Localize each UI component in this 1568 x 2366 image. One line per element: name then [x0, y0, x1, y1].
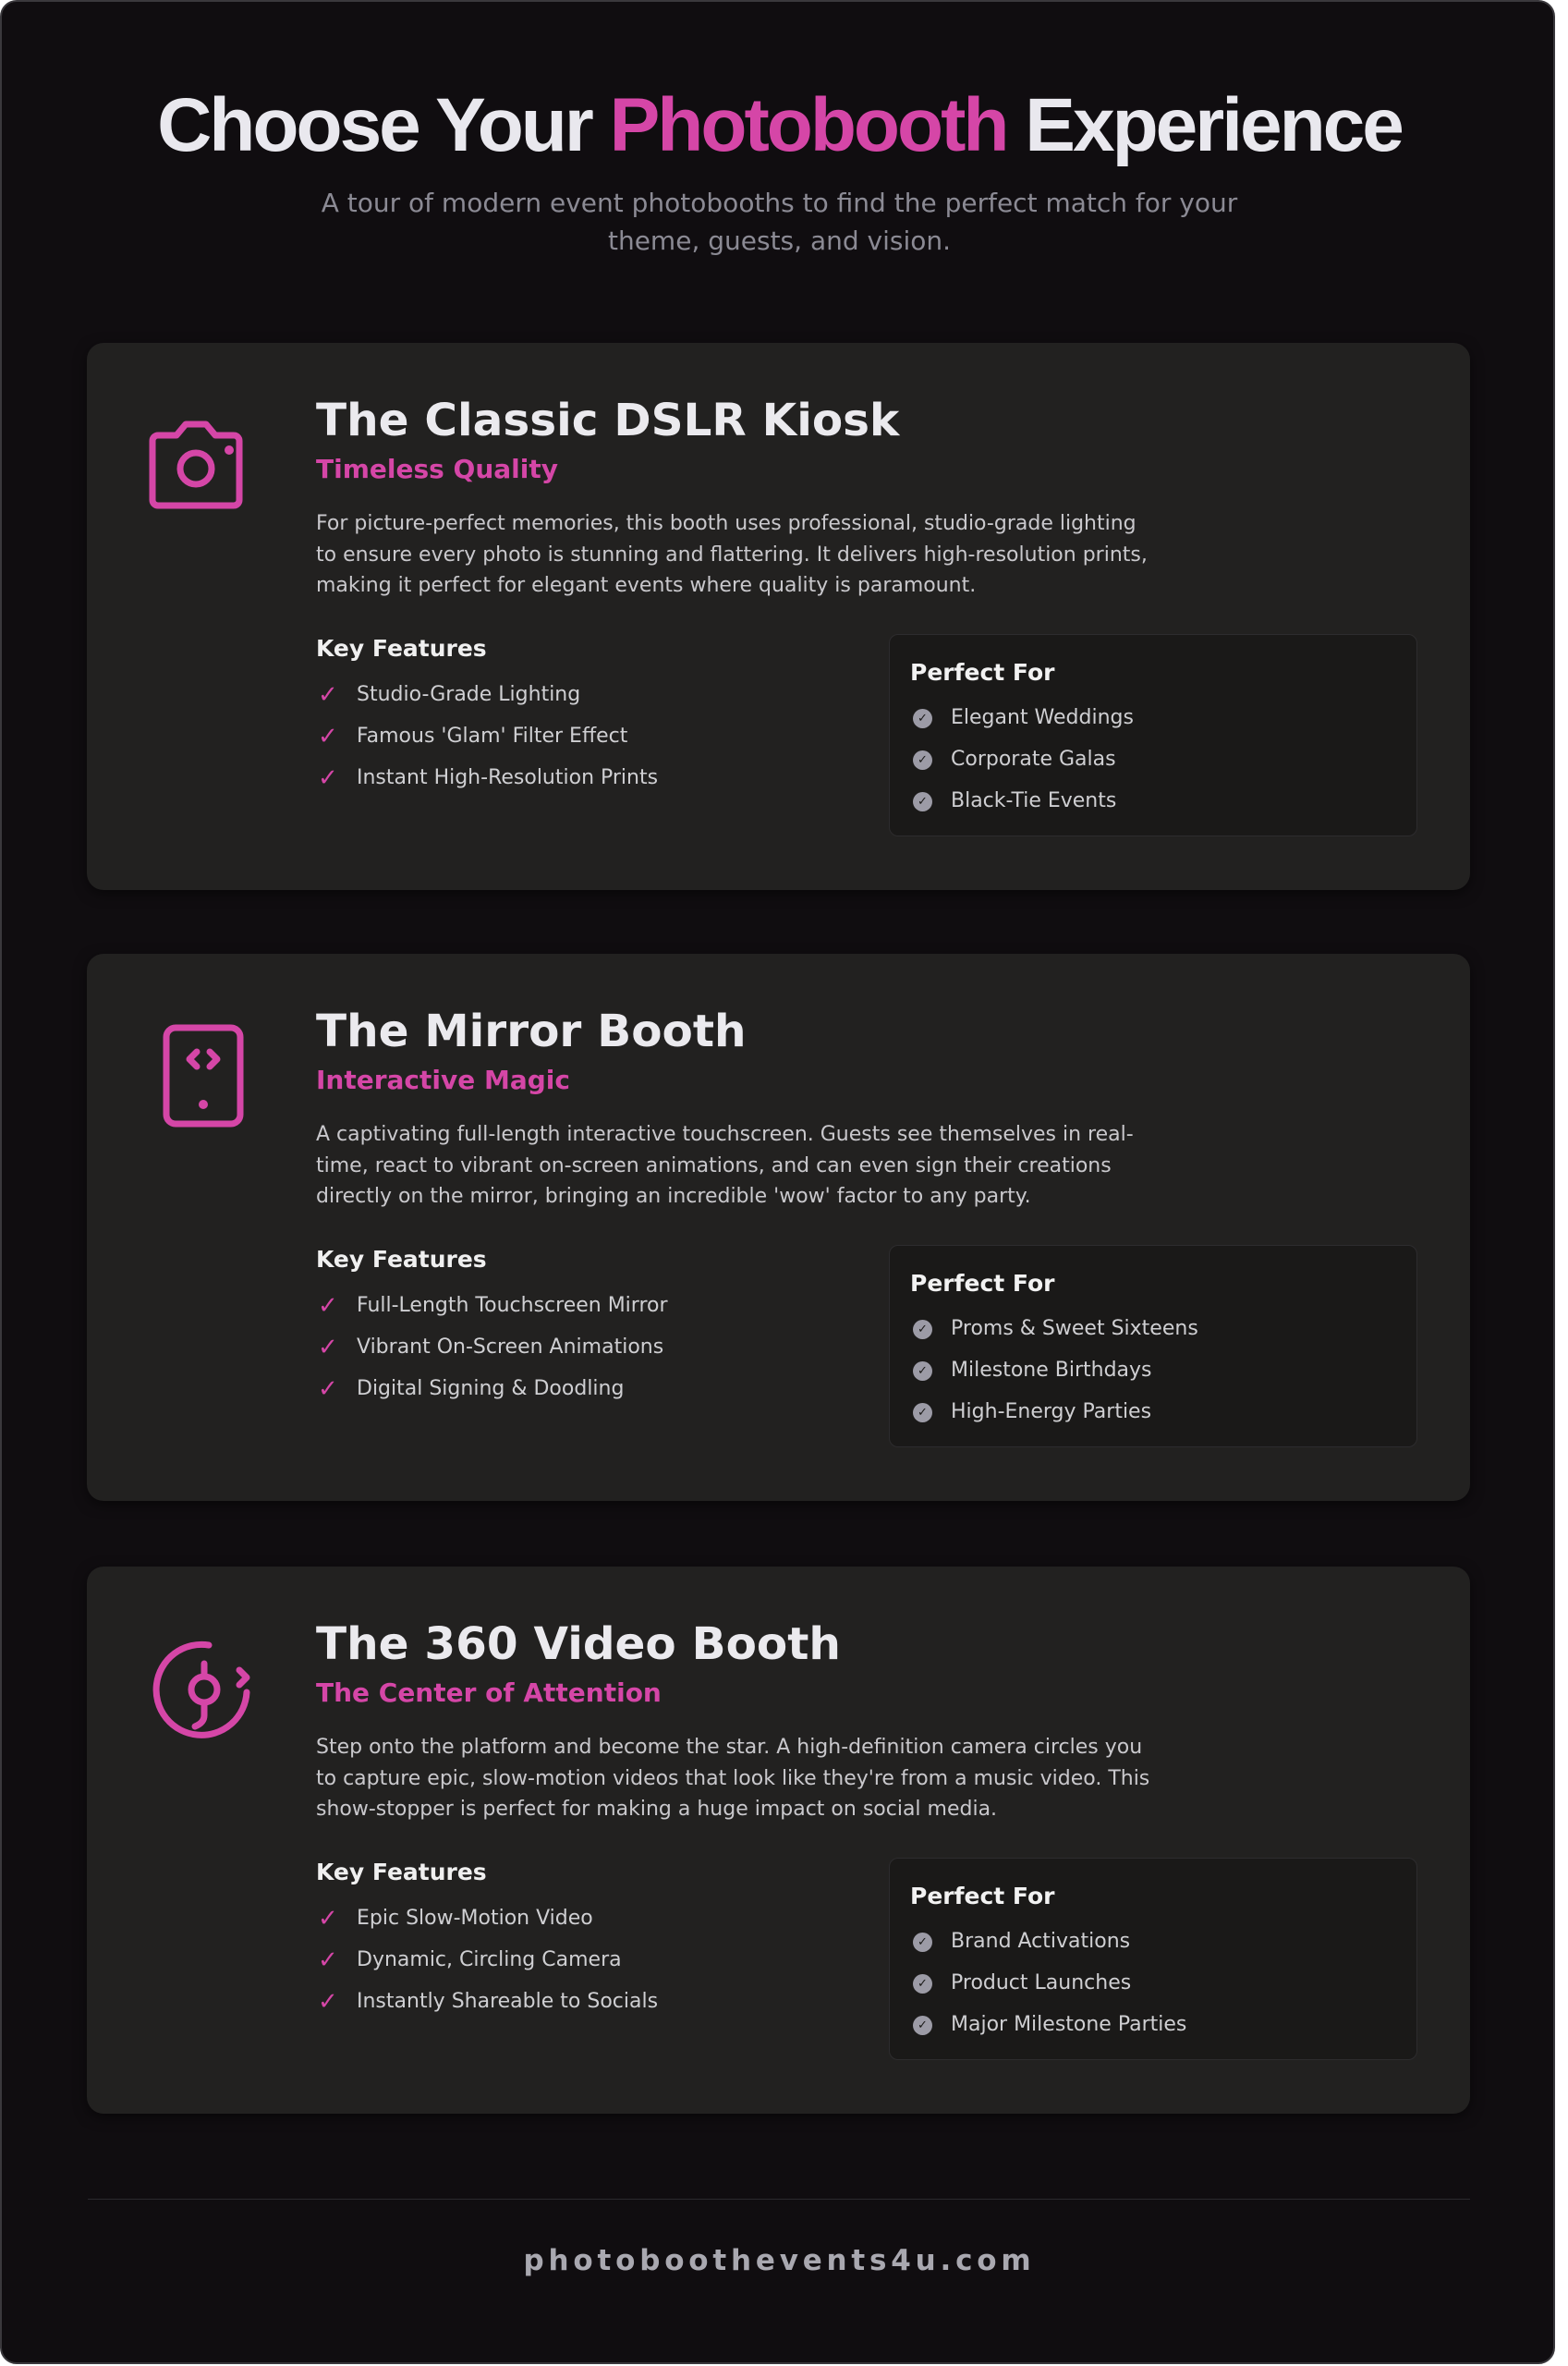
perfect for box: Major Milestone Parties	[951, 2013, 1186, 2036]
key features heading: Key Features	[316, 635, 487, 662]
features list: Instant High-Resolution Prints	[357, 766, 658, 789]
perfect for box	[889, 1245, 1417, 1447]
heading: The 360 Video Booth	[316, 1618, 841, 1670]
panel: mirror booth	[87, 954, 1470, 1501]
features list	[322, 1294, 668, 1400]
perfect for box: Perfect For	[910, 1883, 1054, 1909]
subtitle	[322, 188, 1238, 256]
perfect for box: Proms & Sweet Sixteens	[951, 1317, 1198, 1340]
perfect for box: Black-Tie Events	[951, 789, 1116, 812]
perfect for box: Brand Activations	[951, 1930, 1130, 1953]
features list: Digital Signing & Doodling	[357, 1377, 624, 1400]
tagline: Interactive Magic	[316, 1065, 570, 1095]
features list: Dynamic, Circling Camera	[357, 1948, 622, 1971]
features list: Famous 'Glam' Filter Effect	[357, 725, 627, 748]
perfect for box	[889, 634, 1417, 836]
perfect for box: High-Energy Parties	[951, 1400, 1151, 1423]
subtitle: theme, guests, and vision.	[608, 226, 951, 256]
icon: 360 rotation	[153, 1641, 249, 1738]
heading: The Classic DSLR Kiosk	[316, 395, 899, 446]
features list: Studio-Grade Lighting	[357, 683, 580, 706]
panel: 360 video booth	[87, 1567, 1470, 2114]
perfect for box: Milestone Birthdays	[951, 1359, 1152, 1382]
footer url: photoboothevents4u.com	[524, 2244, 1035, 2277]
features list: Full-Length Touchscreen Mirror	[357, 1294, 668, 1317]
title: Choose Your Photobooth Experience	[157, 83, 1402, 167]
perfect for box	[889, 1858, 1417, 2060]
icon: camera	[150, 421, 242, 508]
perfect for box: Perfect For	[910, 659, 1054, 686]
panel: classic DSLR kiosk	[87, 343, 1470, 890]
features list: Epic Slow-Motion Video	[357, 1907, 593, 1930]
key features heading: Key Features	[316, 1246, 487, 1273]
tagline: The Center of Attention	[316, 1677, 662, 1708]
features list	[322, 683, 658, 789]
heading: The Mirror Booth	[316, 1006, 747, 1057]
description: Step onto the platform and become the star. A high-definition camera circles you to capture epic, slow-motion videos that look like they're from a music video. This show-stopper is perfect for making a huge impact on social media.	[316, 1736, 1149, 1821]
key features heading: Key Features	[316, 1859, 487, 1885]
perfect for box: Product Launches	[951, 1971, 1131, 1994]
icon: mirror	[163, 1024, 244, 1128]
perfect for box: Perfect For	[910, 1270, 1054, 1297]
perfect for box: Corporate Galas	[951, 748, 1116, 771]
features list: Instantly Shareable to Socials	[357, 1990, 658, 2013]
tagline: Timeless Quality	[316, 454, 558, 484]
features list: Vibrant On-Screen Animations	[357, 1335, 663, 1359]
features list	[322, 1907, 658, 2013]
description: For picture-perfect memories, this booth uses professional, studio-grade lighting to ensure every photo is stunning and flattering. It delivers high-resolution prints, making it perfect for elegant events where quality is paramount.	[316, 512, 1148, 597]
perfect for box: Elegant Weddings	[951, 706, 1134, 729]
description: A captivating full-length interactive touchscreen. Guests see themselves in real-time, react to vibrant on-screen animations, and can even sign their creations directly on the mirror, bringing an incredible 'wow' factor to any party.	[316, 1123, 1134, 1208]
subtitle: A tour of modern event photobooths to find the perfect match for your	[322, 188, 1237, 218]
